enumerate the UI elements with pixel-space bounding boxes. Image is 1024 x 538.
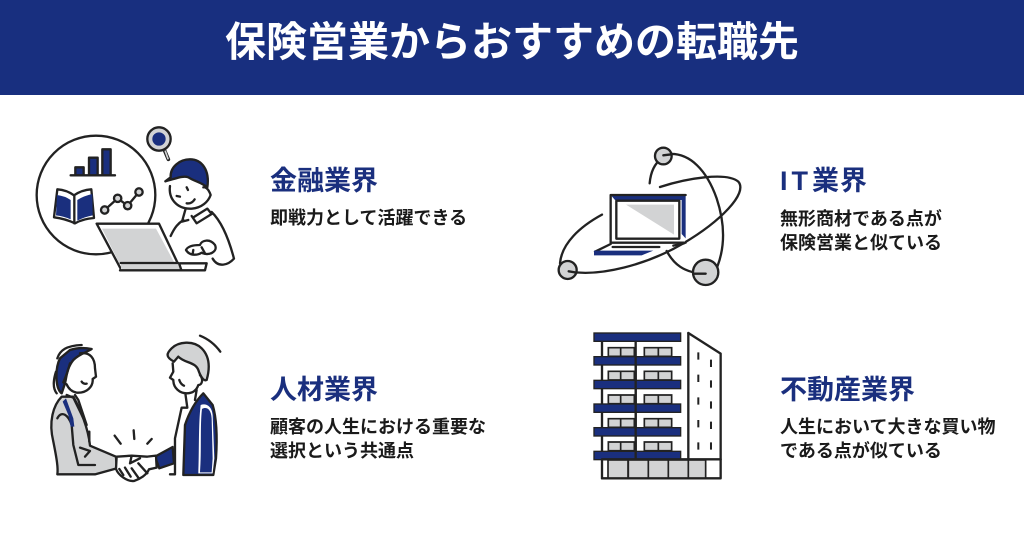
text: finance: 即戦力として活躍できる — [270, 208, 467, 228]
text: real estate — [780, 417, 995, 461]
heading: IT: IT業界 — [780, 166, 868, 196]
right person — [155, 343, 217, 475]
text: real estate: 人生において大きな買い物 — [780, 417, 995, 437]
icon: laptop with orbits — [559, 148, 740, 285]
left person — [51, 345, 117, 474]
text: IT — [780, 209, 942, 253]
hands — [115, 430, 157, 481]
text: IT: 保険営業と似ている — [780, 233, 942, 253]
heading: real estate: 不動産業界 — [780, 375, 915, 405]
icon: handshake — [51, 336, 220, 481]
icon: finance person with laptop — [37, 127, 234, 270]
title banner — [0, 0, 1024, 95]
icon: apartment building — [594, 333, 721, 478]
heading: HR: 人材業界 — [270, 375, 378, 405]
text: HR: 選択という共通点 — [270, 441, 414, 461]
text: HR — [270, 417, 486, 461]
title: 保険営業からおすすめの転職先 — [225, 19, 799, 65]
text: real estate: である点が似ている — [780, 441, 942, 461]
heading: finance: 金融業界 — [270, 166, 378, 196]
text: HR: 顧客の人生における重要な — [270, 417, 486, 437]
text: IT: 無形商材である点が — [780, 209, 942, 229]
